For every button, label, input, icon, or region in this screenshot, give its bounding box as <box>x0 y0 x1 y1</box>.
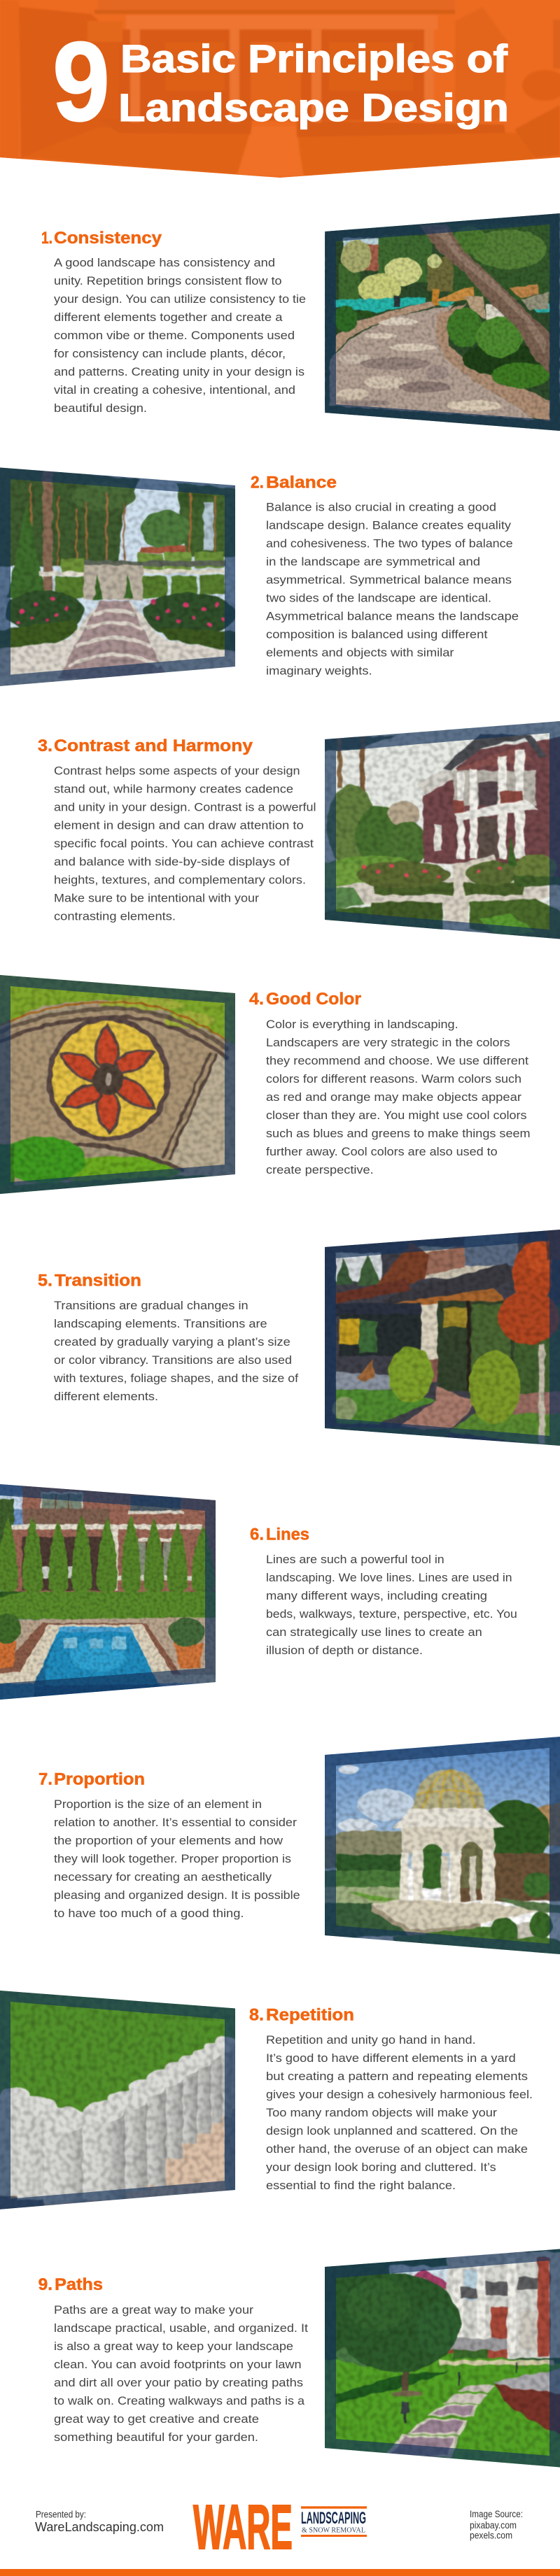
text block: transition: or color vibrancy. Transitions are also used <box>54 1353 292 1367</box>
text block: transition: different elements. <box>54 1390 158 1403</box>
text block: balance: Asymmetrical balance means the landscape <box>266 610 519 622</box>
image: formal rose garden <box>0 460 243 695</box>
text block: consistency: unity. Repetition brings consistent flow to <box>54 274 281 287</box>
text block: contrast and harmony: element in design and can draw attention to <box>54 818 304 832</box>
text block: contrast and harmony: heights, textures, and complementary colors. <box>54 873 306 886</box>
title text: Landscape Design <box>118 85 509 129</box>
image frame overlay <box>0 975 235 1194</box>
text block: paths: something beautiful for your garden. <box>54 2431 258 2444</box>
heading: lines: Lines <box>266 1525 309 1544</box>
presented by: WareLandscaping.com <box>35 2520 164 2534</box>
text block: balance: in the landscape are symmetrical and <box>266 555 480 568</box>
heading: good color: Good Color <box>266 990 361 1009</box>
image frame overlay <box>325 213 560 431</box>
text block: repetition: other hand, the overuse of an object can make <box>266 2142 528 2156</box>
text block: repetition: Too many random objects will make your <box>266 2106 497 2119</box>
text block: consistency: A good landscape has consistency and <box>54 256 275 269</box>
text block: good color: closer than they are. You might use cool colors <box>266 1109 526 1122</box>
heading: repetition: 8. <box>249 2005 264 2024</box>
text block: repetition: essential to find the right balance. <box>266 2179 456 2192</box>
text block: good color: as red and orange may make objects appear <box>266 1090 522 1104</box>
text block: balance: composition is balanced using different <box>266 628 488 641</box>
text block: proportion: Proportion is the size of an element in <box>54 1798 262 1811</box>
text block: balance <box>266 501 519 677</box>
heading: transition: 5. <box>38 1271 52 1290</box>
panel: 6 lines <box>0 1481 517 1705</box>
image frame overlay <box>0 1991 235 2209</box>
text block: proportion <box>54 1798 300 1920</box>
text block: balance: and cohesiveness. The two types of balance <box>266 537 513 550</box>
text block: transition: created by gradually varying a plant’s size <box>54 1335 290 1349</box>
title text: Basic Principles of <box>120 36 507 80</box>
text block: paths: great way to get creative and create <box>54 2412 259 2426</box>
image: cypress hedge and pool <box>0 1481 219 1705</box>
presented by: Presented by: <box>36 2510 86 2519</box>
image frame overlay <box>0 1484 216 1700</box>
panel: 5 transition <box>38 1227 560 1452</box>
header photo background <box>0 0 560 182</box>
text block: good color: colors for different reasons. Warm colors such <box>266 1072 522 1086</box>
heading: transition: Transition <box>55 1271 141 1290</box>
text block: consistency: for consistency can include plants, décor, <box>54 347 286 360</box>
text block: lines: Lines are such a powerful tool in <box>266 1553 444 1566</box>
text block: balance: Balance is also crucial in creating a good <box>266 501 496 513</box>
logo: ware landscaping and snow removal: WARE <box>193 2493 293 2563</box>
text block: good color: further away. Cool colors are also used to <box>266 1145 498 1158</box>
text block: transition <box>53 1299 298 1403</box>
text block: lines: many different ways, including creating <box>266 1589 487 1602</box>
text block: repetition: gives your design a cohesively harmonious feel. <box>266 2088 533 2101</box>
text block: repetition: design look unplanned and scattered. On the <box>266 2124 518 2137</box>
text block: contrast and harmony: specific focal points. You can achieve contrast <box>54 837 314 850</box>
text block: consistency: and patterns. Creating unity in your design is <box>54 365 304 378</box>
heading: contrast and harmony: 3. <box>38 736 52 755</box>
logo: ware landscaping and snow removal: LANDSCAPING <box>301 2509 366 2528</box>
image source <box>470 2509 523 2540</box>
heading: contrast and harmony: Contrast and Harmony <box>54 736 253 755</box>
image: stone garden path <box>325 210 560 434</box>
image frame overlay <box>325 1737 560 1954</box>
text block: lines: beds, walkways, texture, perspective, etc. You <box>266 1607 517 1621</box>
text block: repetition <box>266 2033 533 2192</box>
text block: consistency: common vibe or theme. Components used <box>54 329 295 342</box>
text block: paths: and dirt all over your patio by creating paths <box>54 2376 303 2389</box>
text block: repetition: your design look boring and cluttered. It’s <box>266 2161 496 2174</box>
logo: ware landscaping and snow removal: & SNOW REMOVAL <box>302 2527 365 2535</box>
text block: balance: asymmetrical. Symmetrical balance means <box>266 574 512 586</box>
heading: lines: 6. <box>250 1525 264 1544</box>
heading: consistency: Consistency <box>54 229 162 248</box>
text block: repetition: but creating a pattern and repeating elements <box>266 2070 528 2083</box>
text block: balance: imaginary weights. <box>266 664 372 677</box>
heading: proportion: Proportion <box>54 1770 145 1789</box>
text block: paths: clean. You can avoid footprints on your lawn <box>54 2358 302 2371</box>
text block: proportion: necessary for creating an aesthetically <box>54 1870 272 1884</box>
image frame overlay <box>0 467 235 686</box>
image frame overlay <box>325 2249 560 2468</box>
text block: consistency: your design. You can utilize consistency to tie <box>54 292 306 306</box>
text block: paths <box>54 2303 308 2444</box>
text block: contrast and harmony: Contrast helps some aspects of your design <box>54 764 300 777</box>
image frame overlay <box>325 721 560 939</box>
panel: 3 contrast and harmony <box>38 718 560 946</box>
heading: good color: 4. <box>249 990 264 1009</box>
text block: contrast and harmony <box>54 764 316 923</box>
text block: proportion: they will look together. Proper proportion is <box>54 1852 291 1865</box>
image frame overlay <box>325 1230 560 1446</box>
image: concrete cylinder edging <box>0 1982 243 2214</box>
image source: pixabay.com <box>470 2520 517 2531</box>
image: brick house with columns <box>321 718 560 946</box>
bottom bar <box>0 2569 560 2576</box>
text block: proportion: to have too much of a good thing. <box>54 1907 244 1920</box>
text block: proportion: the proportion of your elements and how <box>54 1834 284 1847</box>
heading: repetition: Repetition <box>266 2005 354 2024</box>
text block: repetition: It’s good to have different elements in a yard <box>266 2051 516 2065</box>
title numeral 9: 9 <box>52 19 110 145</box>
text block: balance: landscape design. Balance creates equality <box>266 519 512 532</box>
panel: 8 repetition <box>0 1982 533 2214</box>
text block: lines <box>266 1553 517 1657</box>
text block: good color <box>266 1018 531 1176</box>
text block: transition: landscaping elements. Transitions are <box>54 1317 267 1330</box>
text block: consistency: beautiful design. <box>54 401 147 415</box>
text block: proportion: pleasing and organized design. It is possible <box>54 1888 300 1902</box>
heading: balance: 2. <box>251 473 264 492</box>
panel: 9 paths <box>38 2246 560 2475</box>
text block: lines: can strategically use lines to create an <box>266 1625 482 1639</box>
text block: balance: two sides of the landscape are identical. <box>266 592 491 604</box>
heading: consistency: 1. <box>41 229 52 248</box>
header banner <box>0 0 560 182</box>
text block: paths: to walk on. Creating walkways and paths is a <box>54 2394 305 2407</box>
text block: transition: Transitions are gradual changes in <box>54 1299 248 1312</box>
heading: paths: 9. <box>38 2275 52 2294</box>
footer <box>0 2493 560 2576</box>
text block: consistency <box>54 256 306 415</box>
text block: balance: elements and objects with similar <box>266 646 454 659</box>
text block: contrast and harmony: Make sure to be intentional with your <box>54 891 259 904</box>
panel: 4 good color <box>0 971 531 1202</box>
text block: transition: with textures, foliage shapes, and the size of <box>53 1372 298 1385</box>
image: modern house with bushes <box>321 1227 560 1452</box>
text block: paths: Paths are a great way to make your <box>54 2303 253 2317</box>
heading: paths: Paths <box>55 2275 103 2294</box>
image source: Image Source: <box>470 2509 523 2519</box>
panel: 7 proportion <box>38 1731 560 1959</box>
image: stepping stone garden path <box>321 2246 560 2475</box>
text block: good color: Color is everything in landscaping. <box>266 1018 458 1031</box>
text block: contrast and harmony: and balance with side-by-side displays of <box>54 855 290 868</box>
text block: paths: landscape practical, usable, and organized. It <box>54 2321 308 2335</box>
image: mosaic flower paving <box>0 971 239 1202</box>
heading: balance: Balance <box>266 473 337 492</box>
text block: good color: create perspective. <box>266 1163 374 1176</box>
text block: lines: illusion of depth or distance. <box>266 1644 423 1657</box>
text block: repetition: Repetition and unity go hand in hand. <box>266 2033 476 2047</box>
image: white marble gazebo <box>321 1731 560 1959</box>
text block: contrast and harmony: and unity in your design. Contrast is a powerful <box>54 800 316 813</box>
text block: contrast and harmony: contrasting elements. <box>54 909 176 923</box>
heading: proportion: 7. <box>38 1770 52 1789</box>
text block: good color: they recommend and choose. We use different <box>266 1054 528 1067</box>
text block: lines: landscaping. We love lines. Lines are used in <box>266 1571 512 1584</box>
panel: 2 balance <box>0 460 519 695</box>
text block: paths: is also a great way to keep your landscape <box>54 2340 293 2353</box>
image source: pexels.com <box>470 2531 512 2540</box>
text block: consistency: vital in creating a cohesive, intentional, and <box>54 383 295 397</box>
text block: good color: Landscapers are very strategic in the colors <box>266 1036 510 1049</box>
presented by <box>35 2510 164 2534</box>
panel: 1 consistency <box>41 210 560 434</box>
text block: contrast and harmony: stand out, while harmony creates cadence <box>54 782 293 795</box>
title text <box>118 36 509 129</box>
text block: good color: such as blues and greens to make things seem <box>266 1127 531 1140</box>
text block: consistency: different elements together and create a <box>54 311 283 324</box>
text block: proportion: relation to another. It’s essential to consider <box>54 1816 297 1829</box>
